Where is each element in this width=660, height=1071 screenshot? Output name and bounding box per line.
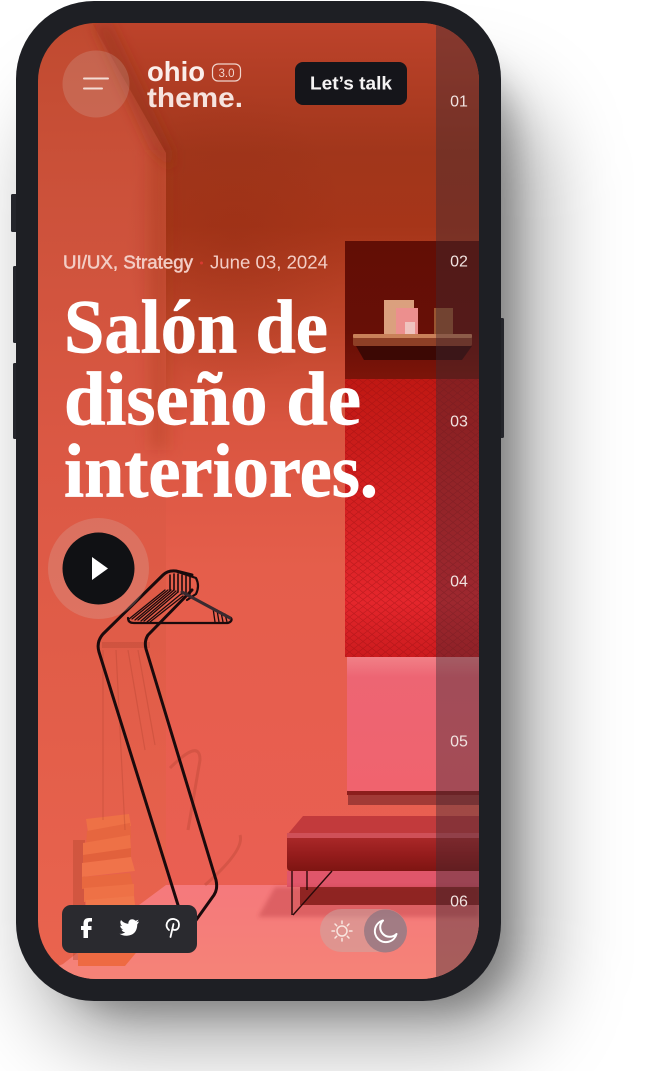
right index strip	[436, 23, 479, 979]
wall shadows of rack	[102, 645, 241, 885]
logo: ohio	[147, 56, 205, 87]
pink panel	[347, 657, 479, 805]
logo	[147, 56, 243, 113]
room photo	[38, 23, 479, 979]
phone screen	[38, 23, 479, 979]
title: diseño de	[64, 358, 361, 442]
index numbers: 04	[450, 574, 468, 590]
back wall darker zone	[222, 239, 248, 286]
play button	[48, 518, 149, 619]
icon: twitter	[120, 919, 139, 936]
bench floor shadow	[258, 887, 479, 917]
back wall	[166, 153, 479, 394]
button: let's talk	[295, 62, 407, 105]
phone shadow	[40, 60, 540, 1040]
icon: moon	[375, 920, 396, 942]
button: let's talk: Let’s talk	[310, 74, 393, 94]
index numbers	[450, 94, 468, 910]
logo: 3.0	[218, 68, 234, 80]
index numbers: 01	[450, 94, 468, 110]
theme toggle	[320, 909, 407, 952]
clothes rack	[98, 571, 232, 923]
ceiling	[92, 23, 479, 153]
icon: sun	[332, 921, 352, 941]
index numbers: 03	[450, 414, 468, 430]
wall band behind bench	[287, 871, 479, 887]
logo: theme.	[147, 82, 243, 113]
title	[64, 286, 378, 514]
shelf board	[356, 346, 472, 360]
index numbers: 06	[450, 894, 468, 910]
books stack	[73, 814, 140, 966]
post meta	[63, 252, 328, 272]
ceiling-wall seam shadow	[95, 23, 166, 164]
shelf panel	[345, 241, 479, 379]
quilted red panel	[345, 379, 479, 657]
index numbers: 05	[450, 734, 468, 750]
icon: pinterest	[167, 919, 179, 937]
corner shading	[150, 150, 168, 450]
index numbers: 02	[450, 254, 468, 270]
title: interiores.	[64, 430, 378, 514]
social bar	[62, 905, 197, 953]
shelf items	[384, 300, 414, 335]
hangers	[126, 600, 233, 624]
bench	[287, 816, 479, 915]
icon: facebook	[81, 918, 92, 938]
post meta: June 03, 2024	[210, 252, 328, 272]
post meta: UI/UX, Strategy	[63, 252, 193, 272]
phone side buttons	[11, 194, 504, 439]
menu button	[62, 50, 130, 118]
left wall base	[38, 23, 479, 979]
floor	[38, 885, 479, 979]
title: Salón de	[64, 286, 328, 370]
phone body	[16, 1, 501, 1001]
